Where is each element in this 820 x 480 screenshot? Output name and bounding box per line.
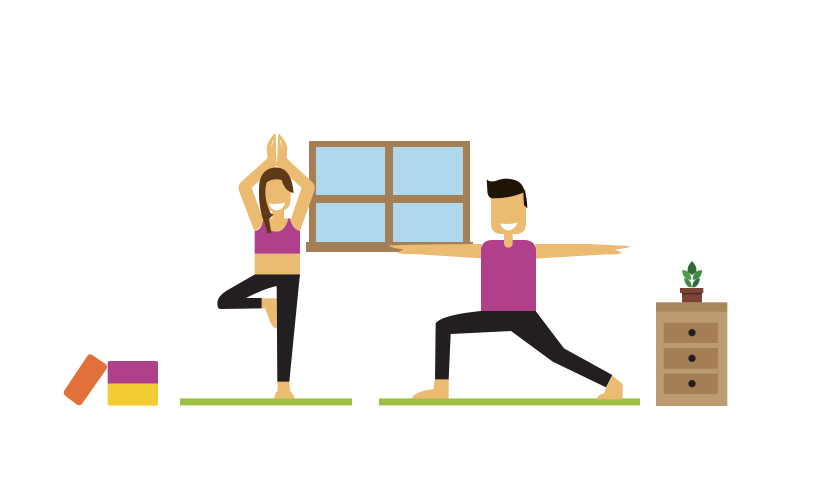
man in warrior pose	[389, 179, 630, 399]
plant pot	[680, 288, 703, 302]
yellow block	[108, 384, 158, 406]
plant leaves	[682, 261, 702, 287]
leggings	[217, 274, 300, 382]
back foot	[597, 376, 623, 399]
shirt	[481, 240, 536, 312]
man lower body	[412, 311, 623, 399]
woman in tree pose	[217, 134, 315, 398]
dresser with plant	[656, 261, 727, 406]
midriff	[255, 254, 300, 274]
drawer 3	[664, 374, 718, 394]
top	[255, 218, 300, 254]
right arm	[535, 244, 630, 259]
woman lower body	[217, 274, 300, 398]
front foot	[412, 379, 449, 399]
smile	[500, 223, 517, 230]
dresser top	[656, 302, 727, 312]
woman upper body	[239, 134, 315, 274]
finger highlights	[271, 140, 282, 149]
drawer 2	[664, 348, 718, 369]
smile	[269, 203, 285, 210]
yoga blocks	[64, 354, 158, 406]
magenta block	[108, 361, 158, 384]
neck and chest	[264, 205, 289, 232]
head	[491, 190, 526, 234]
yoga mat: right	[379, 398, 640, 405]
standing foot	[274, 381, 294, 398]
face	[262, 178, 291, 211]
arms	[239, 134, 315, 231]
knobs	[688, 329, 696, 387]
left arm	[389, 244, 482, 258]
dresser body	[656, 311, 727, 406]
window	[306, 141, 473, 252]
orange block	[64, 354, 107, 405]
hair	[487, 179, 527, 208]
yoga mat: left	[180, 398, 352, 405]
hair	[259, 167, 294, 233]
drawer 1	[664, 323, 718, 343]
leggings	[435, 311, 612, 387]
man upper body	[389, 179, 630, 312]
raised foot	[262, 298, 277, 328]
neck	[504, 227, 513, 248]
